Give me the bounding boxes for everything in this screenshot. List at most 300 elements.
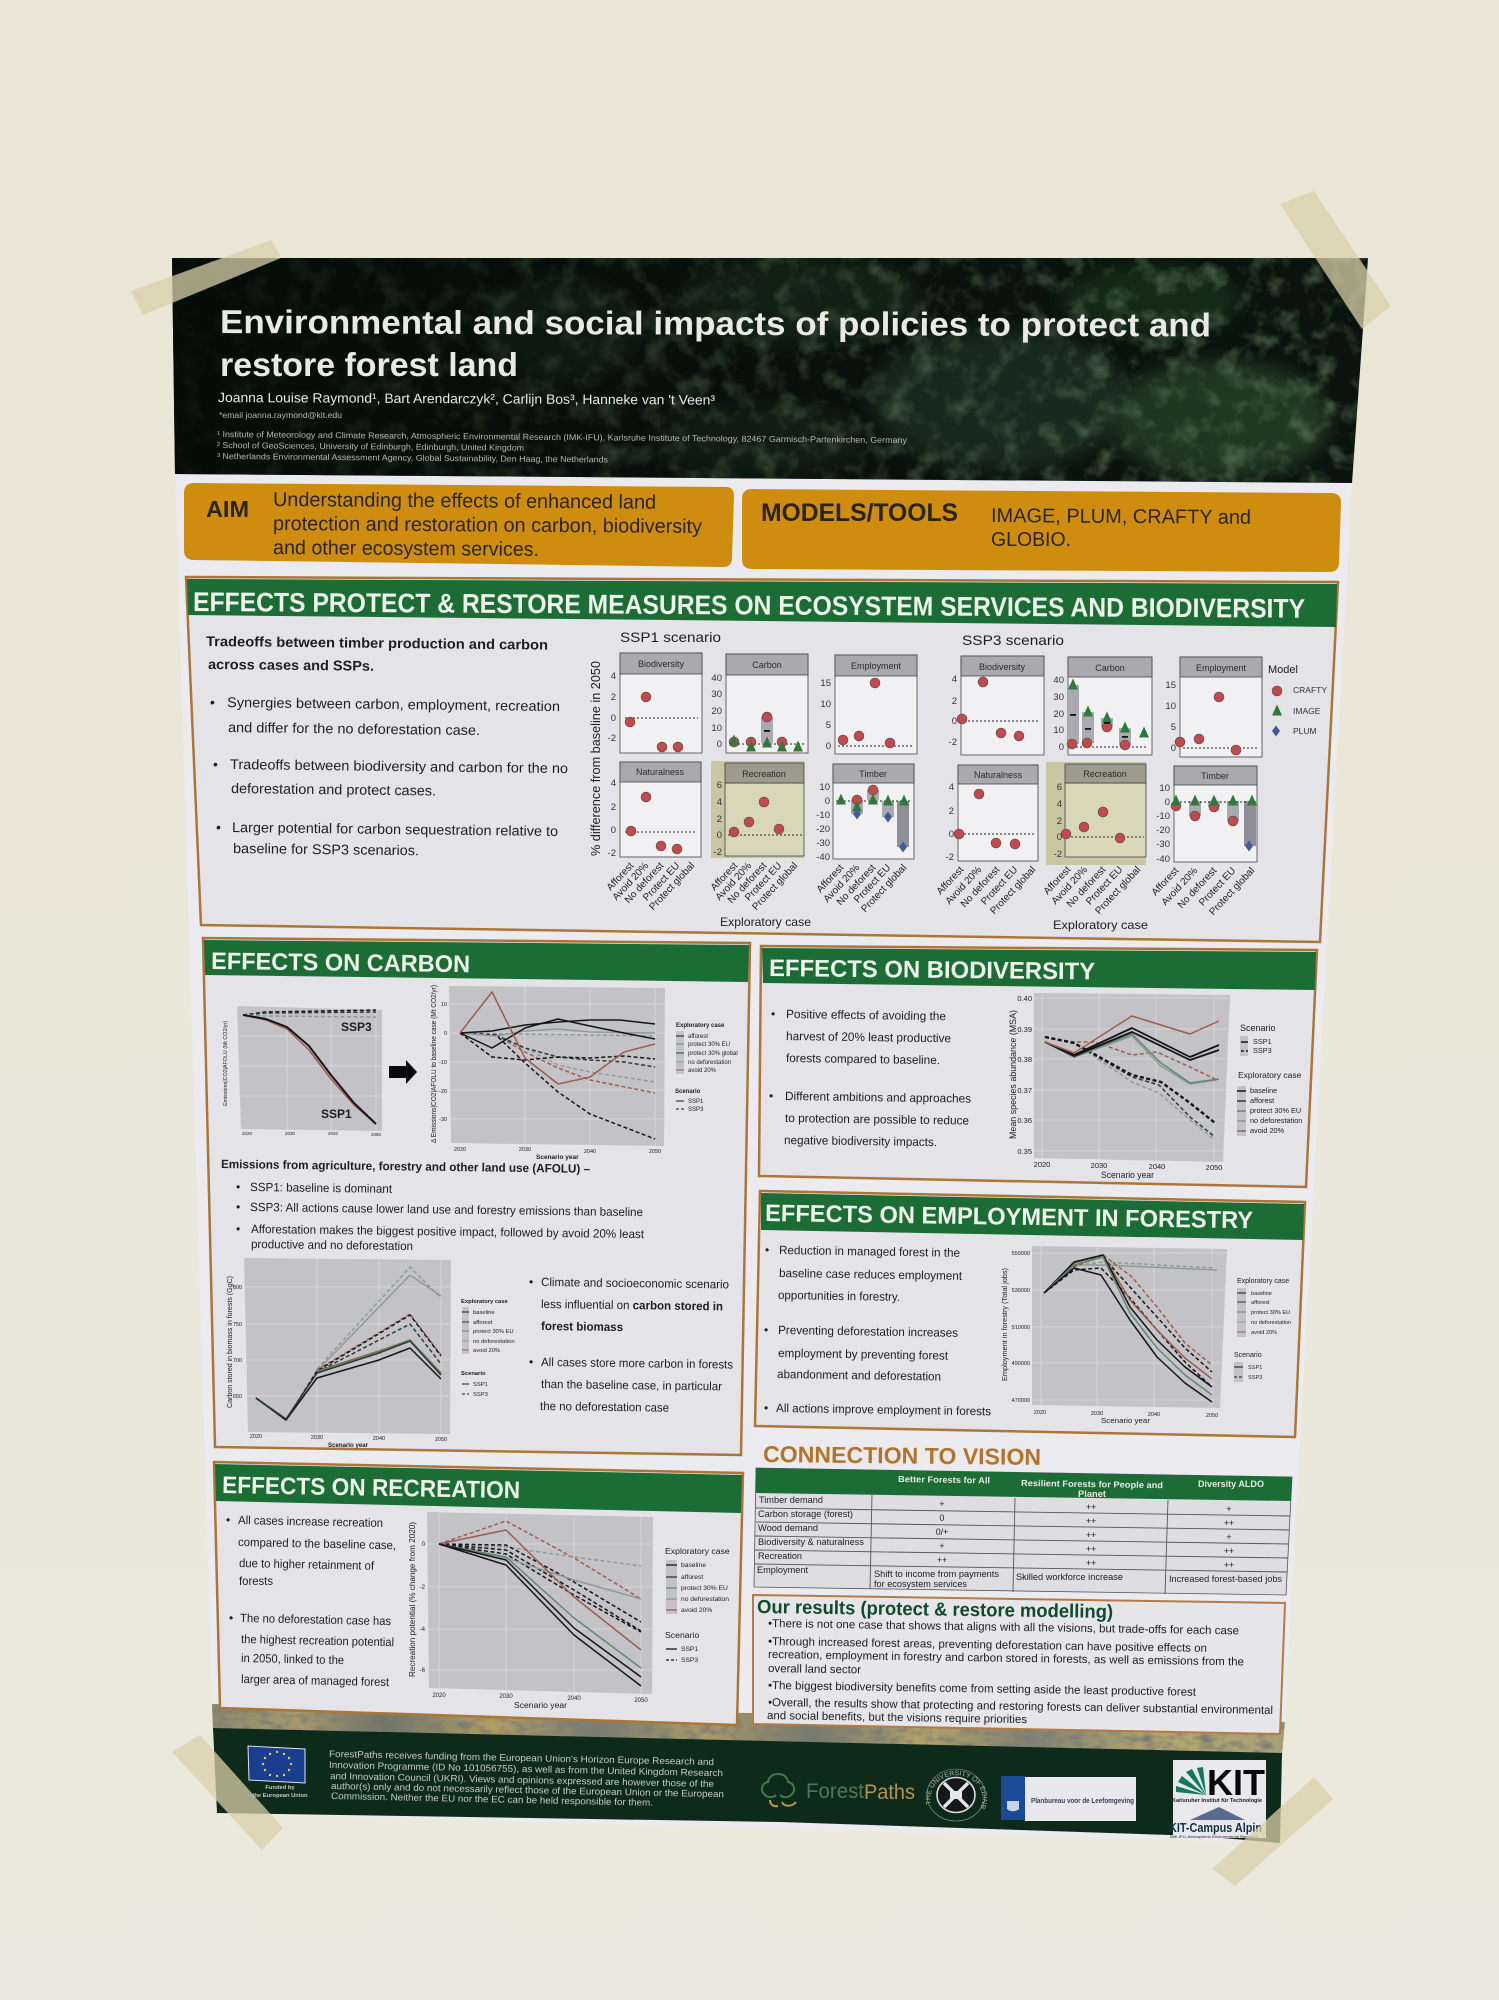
text: forests compared to baseline. [786, 1051, 940, 1067]
table cells: + [1226, 1504, 1232, 1514]
text: to protection are possible to reduce [785, 1111, 969, 1128]
text: • [765, 1243, 769, 1257]
table cells: ++ [1086, 1530, 1096, 1540]
facet x axis labels: Afforest [605, 860, 636, 893]
logo: KIT and KIT-Campus Alpin: KIT [1207, 1762, 1265, 1803]
text: forests [239, 1574, 273, 1588]
facet: SSP3 employment: 10 [1165, 701, 1176, 712]
logo: KIT and KIT-Campus Alpin [1169, 1760, 1266, 1839]
facet x axis labels: Protect EU [979, 865, 1020, 907]
facet: SSP3 recreation [1046, 762, 1146, 865]
panel: aim: AIM [206, 496, 249, 522]
table employment cells [874, 1569, 1283, 1589]
funding statement: Innovation Programme (ID No 101056755), as well as from the United Kingdom Research [329, 1760, 723, 1779]
legend: recreation: protect 30% EU [681, 1585, 728, 1592]
chart: employment in forestry: Scenario year [1101, 1416, 1151, 1425]
facet x axis labels: Protect global [1093, 865, 1143, 917]
chart: carbon stored in forests: 2020 [250, 1434, 262, 1440]
text: AFOLU emissions: • [236, 1200, 240, 1214]
chart: mean species abundance [1008, 993, 1230, 1180]
facet: SSP1 biodiversity [608, 653, 702, 753]
chart: mean species abundance: Scenario year [1101, 1170, 1154, 1180]
heading: EFFECTS PROTECT & RESTORE MEASURES ON ECOSYSTEM SERVICES AND BIODIVERSITY [193, 587, 1305, 624]
text: overall land sector [768, 1663, 861, 1676]
logo: EU flag [248, 1746, 308, 1799]
facet chart titles: SSP1 scenario [620, 629, 721, 645]
header banner [172, 255, 1368, 484]
chart: AFOLU emissions relative to baseline: -10 [439, 1060, 447, 1066]
authors and affiliations: Joanna Louise Raymond¹, Bart Arendarczyk², Carlijn Bos³, Hanneke van 't Veen³ [218, 390, 716, 408]
table cells: 0/+ [936, 1527, 948, 1537]
authors and affiliations: *email joanna.raymond@kit.edu [219, 410, 342, 420]
logo: KIT and KIT-Campus Alpin: IMK-IFU, Atmospheric Environmental Research [1170, 1834, 1258, 1839]
legend: recreation [665, 1546, 730, 1664]
table row labels: Employment [757, 1565, 809, 1575]
text: All actions improve employment in forests [776, 1401, 991, 1418]
facet: SSP1 timber [816, 764, 914, 863]
logo: ForestPaths: Forest [806, 1780, 864, 1803]
table row labels: Recreation [758, 1551, 802, 1561]
legend: recreation: Exploratory case [665, 1546, 730, 1556]
panel: models and tools: MODELS/TOOLS [761, 499, 958, 527]
text: AFOLU emissions: SSP3: All actions cause lower land use and forestry emissions than baseline [250, 1200, 643, 1219]
chart: AFOLU emissions relative to baseline: 2030 [519, 1147, 531, 1153]
table row labels: Carbon storage (forest) [758, 1509, 853, 1519]
heading: EFFECTS ON RECREATION [222, 1472, 520, 1504]
facet: SSP3 recreation: 4 [1057, 799, 1062, 810]
facet x axis labels: Protect EU [852, 863, 893, 905]
chart: AFOLU emissions relative to baseline [429, 985, 665, 1161]
table cells: ++ [1086, 1544, 1096, 1554]
text: negative biodiversity impacts. [784, 1133, 937, 1149]
title [220, 303, 1211, 383]
legend: carbon stored: baseline [473, 1310, 495, 1316]
text: employment by preventing forest [778, 1346, 949, 1363]
logo: Planbureau voor de Leefomgeving: Planbureau voor de Leefomgeving [1031, 1798, 1134, 1805]
facet x axis titles: Exploratory case [720, 915, 811, 929]
text: AFOLU emissions: Afforestation makes the biggest positive impact, followed by avoid 20% least [251, 1222, 645, 1241]
chart: AFOLU emissions absolute: SSP1 [321, 1107, 352, 1121]
text: • [769, 1089, 773, 1103]
chart: carbon stored in forests: 800 [233, 1285, 242, 1291]
legend: biodiversity: Scenario [1240, 1023, 1276, 1033]
table cells: ++ [1086, 1516, 1096, 1526]
chart: AFOLU emissions absolute: 2050 [371, 1132, 382, 1137]
facet: SSP3 carbon: 10 [1053, 725, 1064, 736]
legend: recreation: SSP3 [681, 1657, 698, 1664]
summary text: across cases and SSPs. [208, 656, 374, 674]
facet: SSP3 naturalness [946, 765, 1038, 863]
legend: relative emissions: Exploratory case [676, 1023, 725, 1029]
legend: relative emissions [675, 1023, 738, 1113]
table cells [936, 1499, 1234, 1570]
facet: SSP3 naturalness: 2 [949, 806, 954, 817]
facet: SSP1 biodiversity: Biodiversity [638, 659, 685, 669]
legend: employment: afforest [1251, 1300, 1270, 1306]
title: Environmental and social impacts of policies to protect and [220, 303, 1211, 343]
heading: Our results (protect & restore modelling) [757, 1597, 1113, 1623]
chart: mean species abundance: 2020 [1034, 1160, 1050, 1169]
chart: AFOLU emissions relative to baseline: 2050 [649, 1149, 661, 1155]
facet: SSP3 carbon: 40 [1053, 675, 1064, 686]
legend: biodiversity: Exploratory case [1238, 1070, 1302, 1080]
summary text: Synergies between carbon, employment, recreation [227, 694, 560, 714]
legend: biodiversity: protect 30% EU [1250, 1106, 1301, 1115]
facet: SSP3 biodiversity: 4 [952, 674, 957, 685]
facet: SSP3 employment [1165, 657, 1262, 757]
text: carbon stored: Climate and socioeconomic scenario [541, 1275, 729, 1291]
text: All cases increase recreation [238, 1513, 383, 1530]
legend: employment: avoid 20% [1251, 1330, 1277, 1336]
table row labels: Biodiversity & naturalness [758, 1537, 865, 1547]
chart: AFOLU emissions absolute [223, 1006, 382, 1137]
legend: carbon stored: Scenario [461, 1371, 486, 1377]
background strip: forest photo [212, 1704, 1285, 1756]
facet: SSP3 biodiversity: -2 [949, 737, 957, 748]
chart: mean species abundance: 0.40 [1017, 994, 1032, 1003]
facet x axis labels: Protect global [647, 861, 697, 913]
table employment cells: Shift to income from payments [874, 1569, 1000, 1579]
chart: recreation potential: -6 [420, 1668, 426, 1674]
facet: SSP3 carbon: 30 [1053, 692, 1064, 703]
facet chart titles: SSP3 scenario [962, 632, 1064, 648]
legend: relative emissions: no deforestation [688, 1060, 731, 1066]
authors and affiliations: ¹ Institute of Meteorology and Climate Research, Atmospheric Environmental Research (IMK-IFU), Karlsruhe Institute of Technology, 82467 Garmisch-Partenkirchen, Germany [217, 429, 908, 445]
facet x axis labels: Afforest [935, 864, 966, 897]
facet: SSP3 naturalness: 4 [949, 782, 954, 793]
logo: EU flag: Funded by [265, 1785, 295, 1791]
poster sheet [172, 258, 1368, 1843]
table cells: + [939, 1499, 945, 1509]
legend: biodiversity: SSP3 [1253, 1046, 1272, 1055]
text: • [229, 1611, 233, 1625]
text: carbon stored: All cases store more carbon in forests [541, 1355, 733, 1372]
text: carbon stored: the no deforestation case [540, 1399, 669, 1415]
text: carbon stored: • [529, 1355, 533, 1369]
facet x axis labels: No deforest [959, 864, 1002, 910]
facet: SSP3 carbon: 0 [1059, 742, 1064, 753]
chart: recreation potential: 2050 [634, 1698, 648, 1704]
facet: SSP3 employment: 0 [1171, 743, 1176, 754]
chart: carbon stored in forests: 2050 [435, 1437, 447, 1443]
chart: employment in forestry: 490000 [1012, 1361, 1030, 1367]
summary text: • [216, 819, 221, 835]
table cells: ++ [1224, 1546, 1234, 1556]
chart: AFOLU emissions absolute: 2020 [242, 1131, 253, 1136]
legend: biodiversity: avoid 20% [1250, 1126, 1285, 1135]
summary text: Tradeoffs between biodiversity and carbon for the no [230, 756, 568, 776]
title: restore forest land [220, 346, 518, 383]
heading: EFFECTS ON BIODIVERSITY [769, 955, 1095, 985]
summary text: • [213, 756, 218, 772]
summary text: and differ for the no deforestation case. [228, 719, 480, 738]
legend: employment: SSP1 [1248, 1365, 1262, 1371]
table cells: ++ [1086, 1558, 1096, 1568]
legend: relative emissions: afforest [688, 1034, 708, 1040]
text: AFOLU emissions: SSP1: baseline is dominant [250, 1180, 393, 1196]
funding statement: and Innovation Council (UKRI). Views and opinions expressed are however those of the [330, 1771, 714, 1790]
legend: recreation: afforest [681, 1574, 703, 1581]
facet x axis labels: No deforest [835, 862, 878, 908]
authors and affiliations [217, 390, 908, 464]
legend: recreation: no deforestation [681, 1596, 729, 1603]
panel: effects on carbon [203, 938, 750, 1455]
chart: recreation potential: -4 [420, 1627, 426, 1633]
facet: SSP3 timber: -20 [1156, 825, 1170, 836]
facet x axis labels: No deforest [726, 860, 769, 906]
chart: mean species abundance: Mean species abundance (MSA) [1008, 1010, 1018, 1139]
facet: SSP3 recreation: Recreation [1083, 769, 1127, 779]
chart: employment in forestry: 470000 [1012, 1398, 1030, 1404]
facet: SSP3 recreation: -2 [1054, 849, 1062, 860]
facet x axis labels: Avoid 20% [611, 860, 651, 903]
text: AFOLU emissions: Emissions from agriculture, forestry and other land use (AFOLU) – [221, 1157, 590, 1176]
facet x axis labels: Protect EU [1197, 866, 1238, 908]
legend: carbon stored: SSP1 [473, 1382, 488, 1388]
facet: SSP3 biodiversity [949, 656, 1044, 755]
facet x axis labels: Protect global [988, 865, 1038, 917]
chart: mean species abundance: 0.35 [1017, 1147, 1032, 1156]
legend: model: Model [1268, 664, 1298, 676]
panel: aim: and other ecosystem services. [273, 537, 539, 561]
facet: SSP1 recreation: 2 [717, 814, 722, 825]
chart: recreation potential: 2040 [567, 1696, 581, 1702]
facet x axis labels: Avoid 20% [944, 864, 984, 907]
facet chart titles [620, 629, 1064, 648]
facet: SSP3 employment: Employment [1196, 663, 1247, 673]
facet: SSP3 employment: 15 [1165, 680, 1176, 691]
chart: carbon stored in forests: 750 [233, 1322, 242, 1328]
facet: SSP3 recreation: 2 [1057, 816, 1062, 827]
chart: mean species abundance: 0.39 [1017, 1025, 1032, 1034]
text: carbon stored [529, 1275, 733, 1415]
facet x axis labels: Protect EU [743, 861, 784, 903]
legend: carbon stored: SSP3 [473, 1392, 488, 1398]
chart: recreation potential: 2020 [432, 1693, 446, 1699]
legend: employment [1234, 1278, 1291, 1382]
authors and affiliations: ³ Netherlands Environmental Assessment Agency, Global Sustainability, Den Haag, the Netherlands [217, 451, 608, 464]
summary text [206, 633, 568, 858]
chart: employment in forestry: 2050 [1206, 1413, 1218, 1419]
tape: top left [131, 240, 281, 315]
chart: AFOLU emissions relative to baseline: 10 [441, 1002, 447, 1008]
facet: SSP1 naturalness: Naturalness [636, 767, 685, 777]
chart: recreation potential [408, 1512, 653, 1710]
logo: EU flag: the European Union [252, 1793, 308, 1799]
facet x axis titles [720, 915, 1148, 932]
authors and affiliations: ² School of GeoSciences, University of Edinburgh, Edinburgh, United Kingdom [217, 440, 524, 453]
legend: biodiversity: no deforestation [1250, 1116, 1302, 1125]
funding statement: ForestPaths receives funding from the European Union's Horizon Europe Research and [329, 1749, 714, 1768]
table cells: ++ [1224, 1518, 1234, 1528]
facet: SSP1 recreation: Recreation [742, 769, 786, 779]
facet: SSP1 employment: 15 [820, 678, 831, 689]
chart: employment in forestry: 530000 [1012, 1288, 1030, 1294]
logo: University of Edinburgh: THE UNIVERSITY OF EDINBURGH [926, 1770, 988, 1809]
table cells: ++ [1086, 1502, 1096, 1512]
chart: AFOLU emissions relative to baseline: 0 [444, 1031, 447, 1037]
arrow [389, 1060, 417, 1084]
facet x axis labels: Avoid 20% [1050, 864, 1090, 907]
text: • [226, 1513, 230, 1527]
facet: SSP1 naturalness: 4 [611, 778, 616, 789]
facet: SSP3 timber: 10 [1159, 783, 1170, 794]
facet: SSP3 timber: 0 [1165, 797, 1170, 808]
heading: EFFECTS ON EMPLOYMENT IN FORESTRY [765, 1200, 1253, 1234]
text: Reduction in managed forest in the [779, 1243, 960, 1260]
logo: KIT and KIT-Campus Alpin: Karlsruher Institut für Technologie [1172, 1798, 1262, 1804]
legend: biodiversity: afforest [1250, 1096, 1274, 1105]
legend: biodiversity: SSP1 [1253, 1037, 1272, 1046]
funding statement: author(s) only and do not necessarily reflect those of the European Union or the European [331, 1781, 724, 1800]
text [769, 1007, 971, 1149]
table cells: 0 [940, 1513, 945, 1523]
table employment cells: for ecosystem services [874, 1579, 968, 1589]
panel: effects on employment in forestry [755, 1191, 1305, 1437]
chart: mean species abundance: 0.36 [1017, 1116, 1032, 1125]
table grid lines [755, 1495, 1290, 1594]
facet x axis labels: Avoid 20% [1160, 865, 1200, 908]
table cells: + [1226, 1532, 1232, 1542]
chart: carbon stored in forests: 700 [233, 1358, 242, 1364]
facet: SSP1 biodiversity: -2 [608, 733, 616, 744]
chart: carbon stored in forests: 2040 [373, 1436, 385, 1442]
legend: relative emissions: avoid 20% [688, 1068, 717, 1074]
table row labels: Wood demand [758, 1523, 818, 1533]
table cells: + [939, 1541, 945, 1551]
facet: SSP3 carbon: Carbon [1095, 663, 1125, 673]
text: and social benefits, but the visions require priorities [767, 1710, 1027, 1726]
facet: SSP1 employment: 10 [820, 699, 831, 710]
table: connection to vision [754, 1468, 1292, 1595]
chart: employment in forestry: 550000 [1012, 1251, 1030, 1257]
text: larger area of managed forest [241, 1672, 390, 1689]
facet: SSP3 naturalness: Naturalness [974, 770, 1023, 780]
logo: KIT and KIT-Campus Alpin: KIT-Campus Alpin [1169, 1820, 1262, 1835]
facet: SSP1 naturalness [608, 762, 701, 859]
facet x axis labels: No deforest [623, 860, 666, 906]
table header: Diversity ALDO [1198, 1479, 1264, 1489]
text: abandonment and deforestation [777, 1367, 941, 1384]
facet: SSP1 employment: Employment [851, 661, 902, 671]
logo: Planbureau voor de Leefomgeving [1001, 1776, 1136, 1821]
facet x axis labels: Protect global [1207, 866, 1257, 918]
text: harvest of 20% least productive [786, 1029, 951, 1045]
text: carbon stored: forest biomass [541, 1319, 623, 1334]
facet x axis labels: No deforest [1176, 865, 1219, 911]
chart: mean species abundance: 2030 [1091, 1161, 1107, 1170]
facet x axis labels [605, 860, 1257, 918]
legend: employment: baseline [1251, 1291, 1272, 1297]
text: •Through increased forest areas, preventing deforestation can have positive effects on [768, 1636, 1207, 1655]
facet: SSP1 employment: 5 [826, 720, 831, 731]
chart: carbon stored in forests: Carbon stored in biomass in forests (GgC) [227, 1276, 234, 1408]
chart: carbon stored in forests: Scenario year [328, 1442, 368, 1449]
panel: effects on biodiversity [759, 946, 1317, 1187]
footer band [213, 1728, 1282, 1843]
facet: SSP1 carbon: Carbon [752, 660, 782, 670]
facet: SSP1 timber: Timber [859, 769, 887, 779]
table employment cells: Increased forest-based jobs [1169, 1574, 1283, 1584]
legend: relative emissions: protect 30% global [688, 1051, 738, 1057]
facet: SSP1 carbon: 10 [711, 723, 722, 734]
chart: AFOLU emissions absolute: 2030 [285, 1131, 296, 1136]
heading: connection to vision: CONNECTION TO VISION [763, 1441, 1041, 1470]
facet: SSP1 timber: 10 [819, 782, 830, 793]
text: Positive effects of avoiding the [786, 1007, 946, 1023]
legend: relative emissions: protect 30% EU [688, 1042, 730, 1048]
facet: SSP1 timber: -30 [816, 838, 830, 849]
chart: recreation potential: Scenario year [514, 1701, 567, 1710]
chart: employment in forestry: 2030 [1091, 1411, 1103, 1417]
facet: SSP1 naturalness: -2 [608, 848, 616, 859]
facet: SSP1 timber: -20 [816, 824, 830, 835]
facet: SSP1 carbon: 30 [711, 689, 722, 700]
text [764, 1243, 991, 1418]
chart: recreation potential: -2 [420, 1585, 426, 1591]
chart: mean species abundance: 0.37 [1017, 1086, 1032, 1095]
text: carbon stored: less influential on carbon stored in [541, 1297, 723, 1313]
legend: model [1268, 664, 1327, 736]
facet: SSP3 timber [1156, 766, 1257, 865]
text: compared to the baseline case, [238, 1535, 396, 1552]
facet: SSP1 naturalness: 2 [611, 802, 616, 813]
facet x axis labels: Avoid 20% [714, 860, 754, 903]
legend: recreation: SSP1 [681, 1646, 698, 1653]
facet x axis labels: Afforest [1042, 864, 1073, 897]
chart: employment in forestry: 2040 [1148, 1412, 1160, 1418]
facet: SSP1 recreation: 4 [717, 797, 722, 808]
chart: AFOLU emissions absolute: SSP3 [341, 1020, 372, 1034]
text: baseline case reduces employment [779, 1266, 963, 1283]
panel: our results [753, 1595, 1285, 1734]
facet: SSP3 naturalness: -2 [946, 852, 954, 863]
facet: SSP3 biodiversity: 2 [952, 696, 957, 707]
text: AFOLU emissions: • [236, 1222, 240, 1236]
chart: mean species abundance: 0.38 [1017, 1055, 1032, 1064]
logo: ForestPaths: Paths [864, 1781, 915, 1804]
chart: carbon stored in forests [227, 1258, 451, 1449]
chart: recreation potential: 2030 [499, 1694, 513, 1700]
legend: model: IMAGE [1293, 706, 1321, 716]
chart: carbon stored in forests: 2030 [311, 1435, 323, 1441]
legend: carbon stored: protect 30% EU [473, 1329, 514, 1335]
panel: models and tools: GLOBIO. [991, 529, 1071, 551]
tape: top right [1280, 191, 1391, 329]
legend: employment: protect 30% EU [1251, 1310, 1290, 1316]
text [767, 1618, 1273, 1726]
legend: employment: no deforestation [1251, 1320, 1291, 1326]
table cells: ++ [1224, 1560, 1234, 1570]
facet: SSP1 recreation: 0 [717, 830, 722, 841]
panel: aim [184, 483, 734, 567]
funding statement [329, 1749, 724, 1809]
table header: Better Forests for All [898, 1474, 990, 1485]
facet: SSP1 biodiversity: 4 [611, 671, 616, 682]
text: Different ambitions and approaches [785, 1089, 971, 1106]
chart: AFOLU emissions relative to baseline: 2040 [584, 1149, 596, 1155]
text: due to higher retainment of [239, 1556, 375, 1573]
chart: AFOLU emissions relative to baseline: Scenario year [536, 1154, 579, 1161]
logo: ForestPaths [762, 1774, 915, 1806]
chart: employment in forestry [1000, 1246, 1227, 1425]
facet x axis labels: Protect EU [1084, 865, 1125, 907]
legend: relative emissions: SSP1 [688, 1099, 704, 1105]
facet: SSP3 employment: 5 [1171, 722, 1176, 733]
facet x axis labels: Avoid 20% [822, 862, 862, 905]
text: Preventing deforestation increases [778, 1323, 958, 1340]
facet: SSP3 timber: -30 [1156, 839, 1170, 850]
